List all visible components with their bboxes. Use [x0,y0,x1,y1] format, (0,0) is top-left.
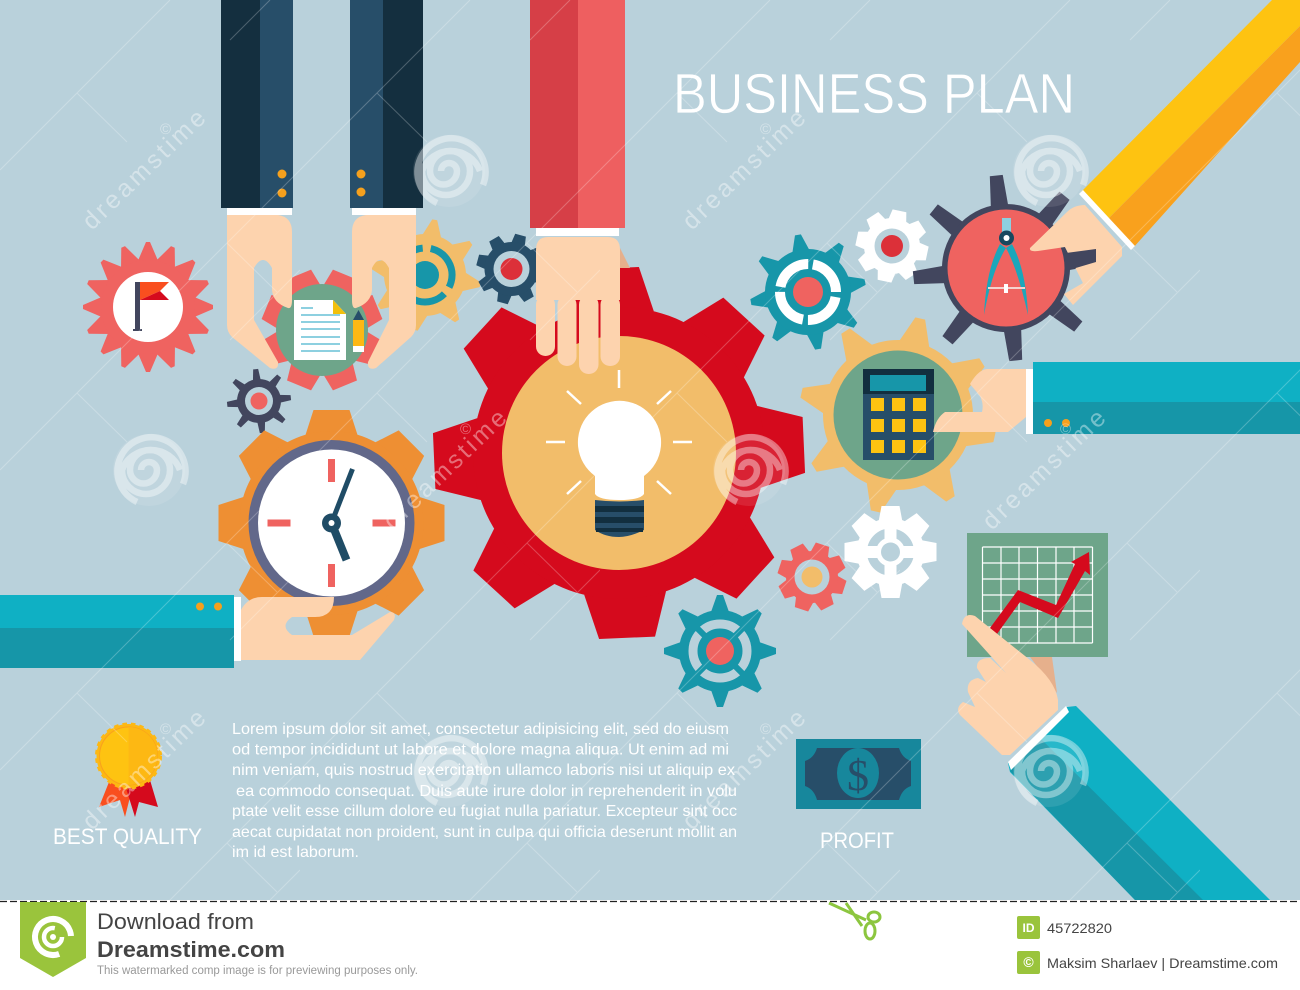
badge: copyright author: Maksim Sharlaev | Dreamstime.com [1047,955,1278,971]
icon: best quality medal [96,724,160,817]
badge: image id [1017,916,1112,939]
logo: green ribbon [20,902,86,977]
chart: rising arrow on green board [967,533,1108,657]
watermark: dreamstime spirals and text: dreamstime [77,704,211,835]
watermark: dreamstime spirals and text: dreamstime [378,404,512,535]
arm: teal lower right sleeve and pointing hand [958,615,1270,900]
label: profit: PROFIT [820,828,894,853]
watermark: dreamstime spirals and text: © [160,121,171,138]
gear: dark with compass [904,166,1108,370]
text block: lorem ipsum: ptate velit esse cillum dolore eu fugiat nulla pariatur. Excepteur sint occ [232,803,737,820]
arm: yellow sleeve and hand with compass gear [1030,0,1300,305]
gear: white lower [844,506,936,598]
badge: copyright author: © [1023,954,1034,970]
badge: image id: ID [1022,921,1035,935]
badge: image id: 45722820 [1047,920,1112,936]
gear: red flag [83,242,213,372]
footer text: download: This watermarked comp image is for previewing purposes only. [97,965,418,977]
arm: right navy sleeve and hand [350,0,423,369]
gear: yellow with calculator [779,296,1017,534]
arm: left navy sleeve and hand [221,0,293,369]
gear: dark small [224,366,294,436]
gear: teal lower [664,595,776,707]
gear: document [244,252,400,408]
gear: dark blue small [469,226,554,312]
icon: money bill [796,739,921,809]
arm: teal right sleeve and hand with calculator [933,362,1300,434]
text block: lorem ipsum: nim veniam, quis nostrud exercitation ullamco laboris nisi ut aliquip ex [232,762,735,779]
watermark: dreamstime spirals and text [77,104,1111,835]
badge: copyright author [1017,951,1278,974]
text block: lorem ipsum: aecat cupidatat non proident, sunt in culpa qui officia deserunt mollit an [232,824,737,841]
watermark: dreamstime spirals and text: dreamstime [77,104,211,235]
watermark: dreamstime spirals and text: © [760,121,771,138]
footer text: download: Dreamstime.com [97,937,285,962]
text block: lorem ipsum: Lorem ipsum dolor sit amet, consectetur adipisicing elit, sed do eiusm [232,721,729,738]
gear: teal upper [741,225,875,359]
title: BUSINESS PLAN [673,62,1075,126]
icon: document and pencil [294,300,364,360]
icon: calculator [863,369,934,460]
gear: white upper [849,203,935,289]
text block: lorem ipsum [232,721,737,861]
footer: white strip with dashed line [0,900,1300,990]
gear: orange clock [218,410,444,636]
watermark: dreamstime spirals and text: © [460,421,471,438]
watermark: dreamstime spirals and text: dreamstime [677,104,811,235]
watermark: dreamstime spirals and text: © [160,721,171,738]
gear: central red with light bulb [426,260,812,646]
watermark: dreamstime spirals and text: dreamstime [977,404,1111,535]
icon: clock ticks and hands [268,459,396,587]
icon: flag [133,282,169,331]
gear: red small lower [769,534,855,620]
icon: scissors [829,903,880,939]
text block: lorem ipsum: ea commodo consequat. Duis aute irure dolor in reprehenderit in volu [236,783,737,800]
icon: light bulb [546,370,692,537]
text block: lorem ipsum: im id est laborum. [232,844,359,861]
text block: lorem ipsum: od tempor incididunt ut labore et dolore magna aliqua. Ut enim ad mi [232,742,729,758]
icon: compass [984,218,1028,315]
gear: yellow with teal rings [360,210,490,340]
icon: money bill: $ [847,751,869,800]
arm: central red sleeve and hand [530,0,630,374]
watermark: dreamstime spirals and text: © [760,721,771,738]
footer text: download [97,909,418,977]
arm: teal left sleeve and hand with clock [0,595,395,668]
footer text: download: Download from [97,909,254,934]
watermark: dreamstime spirals and text: © [1060,421,1071,438]
label: best quality: BEST QUALITY [53,824,202,849]
watermark: dreamstime spirals and text: dreamstime [677,704,811,835]
